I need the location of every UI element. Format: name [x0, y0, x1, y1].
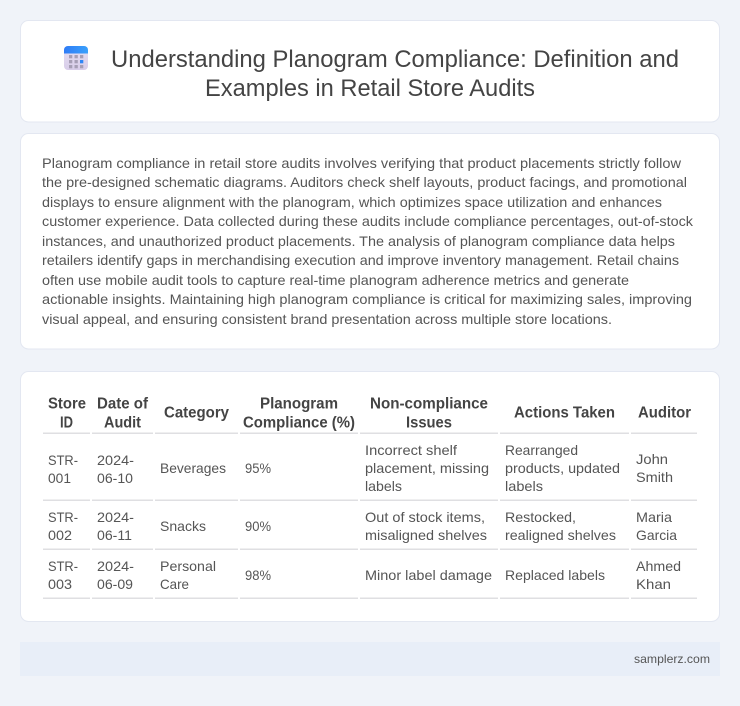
table row: STR-002: misaligned shelves — [365, 527, 487, 543]
table row: STR-001: 95% — [245, 460, 271, 476]
table row: STR-001: 2024- — [97, 452, 134, 468]
table row: STR-001: 001 — [48, 470, 71, 486]
panel: title header — [20, 20, 720, 122]
table row: STR-003: Personal — [160, 558, 216, 574]
table row: STR-001: STR- — [48, 452, 78, 468]
table row: STR-003: 2024- — [97, 558, 134, 574]
table row: STR-002: 06-11 — [97, 527, 132, 543]
table row: STR-002: 90% — [245, 518, 271, 534]
heading — [111, 46, 679, 102]
table header row: ID — [60, 414, 73, 432]
table row: STR-001: products, updated — [505, 460, 620, 476]
table header row: Compliance (%) — [243, 414, 355, 432]
text block: description — [42, 155, 694, 327]
table row: STR-001: Incorrect shelf — [365, 442, 457, 458]
table header row — [48, 396, 691, 432]
footer — [20, 642, 720, 676]
table row: STR-001 — [48, 442, 673, 494]
heading: Examples in Retail Store Audits — [205, 75, 535, 102]
table row: STR-002: Snacks — [160, 518, 206, 534]
table row: STR-001: labels — [505, 478, 543, 494]
table header row: Non-compliance — [370, 396, 488, 412]
table row: STR-002 — [48, 509, 677, 543]
panel: audit table — [20, 372, 720, 622]
table row: STR-003: 06-09 — [97, 576, 133, 592]
text block: description: visual appeal, and ensuring consistent brand presentation across multiple store locations. — [42, 311, 612, 327]
text block: description: Planogram compliance in retail store audits involves verifying that product placements strictly follow — [42, 155, 682, 171]
table header row: Auditor — [638, 404, 691, 422]
table header row: Store — [48, 396, 86, 412]
table row: STR-003 — [48, 558, 681, 592]
footer: samplerz.com — [634, 652, 710, 666]
table row: STR-002: 002 — [48, 527, 72, 543]
table header row: Date of — [97, 396, 149, 412]
text block: description: displays to ensure alignment with the planogram, which optimizes space utilization and enhances — [42, 194, 662, 210]
table row: STR-001: John — [636, 451, 668, 467]
table row: STR-002: Restocked, — [505, 509, 576, 525]
table row: STR-001: Smith — [636, 469, 673, 485]
table row: STR-001: labels — [365, 478, 402, 494]
heading: Understanding Planogram Compliance: Definition and — [111, 46, 679, 73]
text block: description: the pre-designed schematic diagrams. Auditors check shelf layouts, product facings, and promotional — [42, 174, 687, 190]
table row: STR-003: Minor label damage — [365, 567, 492, 583]
text block: description: retailers identify gaps in merchandising execution and improve inventory management. Retail chains — [42, 252, 679, 268]
table row: STR-003: Care — [160, 576, 189, 592]
table row: STR-003: STR- — [48, 558, 78, 574]
table row: STR-001: placement, missing — [365, 460, 489, 476]
table header row: Issues — [406, 414, 452, 432]
table row: STR-002: STR- — [48, 509, 78, 525]
table row: STR-002: Maria — [636, 509, 672, 525]
text block: description: customer experience. Data collected during these audits include compliance percentages, out-of-stock — [42, 213, 694, 229]
table row: STR-002: Garcia — [636, 527, 677, 543]
table row: STR-001: 06-10 — [97, 470, 133, 486]
text block: description: often use mobile audit tools to capture real-time planogram adherence metrics and generate — [42, 272, 629, 288]
table row: STR-003: Ahmed — [636, 558, 681, 574]
table row: STR-003: 003 — [48, 576, 72, 592]
table row: STR-001: Rearranged — [505, 442, 578, 458]
text block: description: actionable insights. Maintaining high planogram compliance is critical for maximizing sales, improving — [42, 291, 692, 307]
table row: STR-003: 98% — [245, 567, 271, 583]
text block: description: instances, and unauthorized product placements. The analysis of planogram compliance data helps — [42, 233, 675, 249]
table row: STR-002: realigned shelves — [505, 527, 616, 543]
table row: STR-002: Out of stock items, — [365, 509, 485, 525]
table header row: Actions Taken — [514, 404, 615, 422]
panel: description — [20, 134, 720, 349]
table row: STR-002: 2024- — [97, 509, 134, 525]
table row: STR-003: Khan — [636, 576, 671, 592]
table row: STR-003: Replaced labels — [505, 567, 605, 583]
table row: STR-001: Beverages — [160, 460, 226, 476]
table header row: Category — [164, 404, 229, 422]
table header row: Audit — [104, 414, 141, 432]
icon: calendar — [64, 46, 88, 70]
table header row: Planogram — [260, 396, 338, 412]
